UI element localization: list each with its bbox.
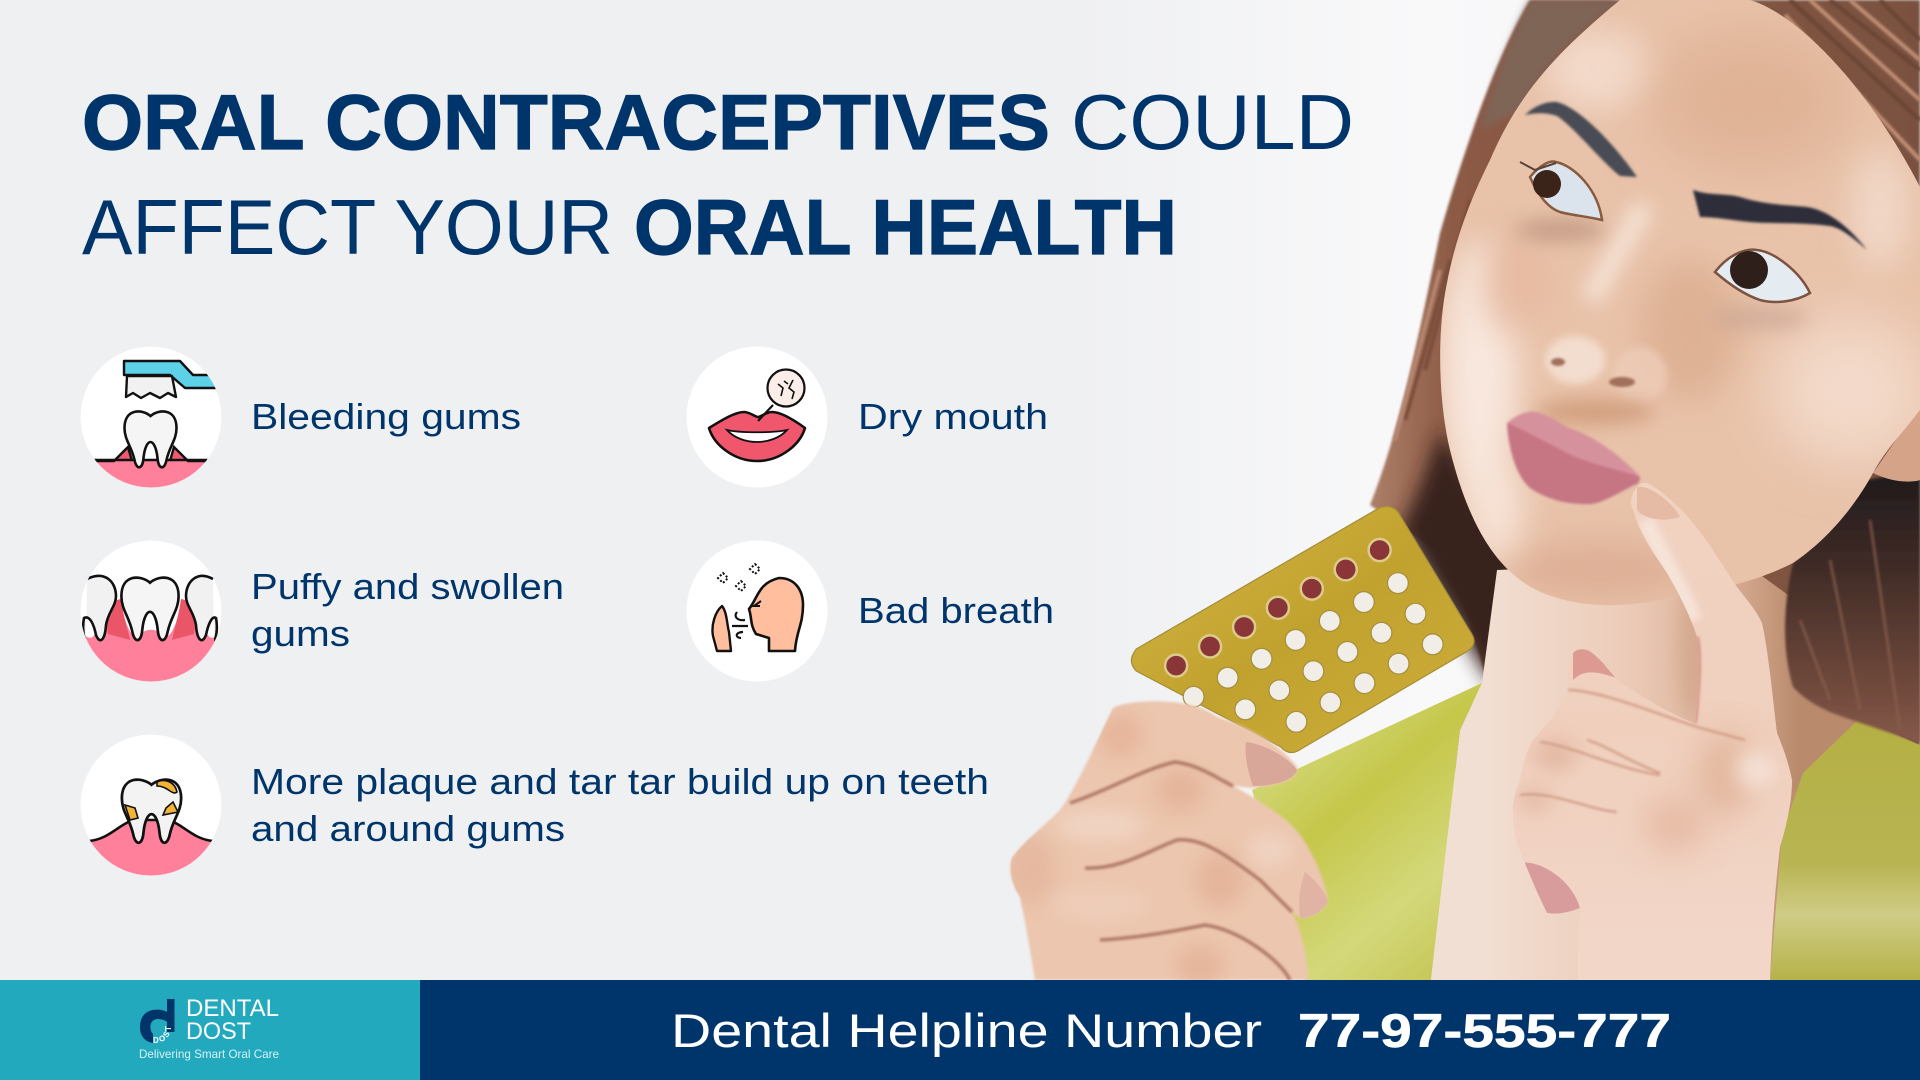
item: dry mouth — [686, 346, 1048, 488]
item: puffy and swollen gums — [80, 540, 564, 690]
finger creases left hand — [1070, 762, 1292, 980]
left hand holding pack — [1005, 701, 1328, 985]
title line 1 regular: COULD — [1071, 78, 1354, 166]
title line 2 bold: ORAL HEALTH — [634, 183, 1177, 271]
icon: swollen gums with teeth — [80, 540, 222, 690]
red pills — [1165, 539, 1391, 677]
hair — [1370, 0, 1920, 820]
lips — [1507, 412, 1640, 504]
white pills — [1183, 573, 1443, 732]
line 2: and around gums — [251, 808, 565, 849]
logo wordmark — [186, 995, 279, 1045]
icon: dry lips — [686, 346, 828, 488]
icon: person with bad breath — [686, 540, 828, 682]
word: dost: DOST — [186, 1018, 251, 1045]
footer teal logo panel — [0, 980, 420, 1080]
footer bar — [0, 980, 1920, 1080]
line 1: More plaque and tar tar build up on teeth — [251, 761, 989, 802]
shirt left — [1252, 683, 1482, 980]
title — [82, 78, 1354, 271]
photo: woman holding contraceptive pill pack — [1005, 0, 1920, 985]
label: Dry mouth — [858, 396, 1048, 437]
blister pack of pills — [1131, 506, 1474, 753]
title line 2 regular: AFFECT YOUR — [82, 183, 613, 271]
shirt right — [1770, 718, 1920, 980]
footer navy band — [420, 980, 1920, 1080]
ear — [1873, 405, 1920, 482]
hand shading — [1517, 487, 1775, 914]
icon: toothbrush and tooth — [80, 346, 222, 490]
lower right hair — [1785, 470, 1920, 743]
item: bleeding gums — [80, 346, 521, 490]
logo mark: S — [161, 1029, 172, 1039]
item: bad breath — [686, 540, 1054, 682]
title line 1 bold: ORAL CONTRACEPTIVES — [82, 78, 1050, 166]
line 1: Puffy and swollen — [251, 566, 564, 607]
icon: tooth with plaque — [80, 734, 222, 890]
logo tagline: Delivering Smart Oral Care — [139, 1047, 279, 1061]
left hand shading — [1005, 713, 1328, 985]
logo mark: D — [153, 1036, 159, 1045]
logo mark: T — [164, 1026, 173, 1031]
line 2: gums — [251, 613, 350, 654]
face shading — [1442, 30, 1920, 598]
item: plaque and tartar — [80, 734, 989, 890]
neck and chest — [1431, 560, 1870, 980]
label: Bleeding gums — [251, 396, 521, 437]
label — [251, 761, 989, 849]
label — [251, 566, 564, 654]
face — [1440, 0, 1920, 605]
right hand with finger on lip — [1513, 483, 1792, 980]
logo mark — [140, 999, 174, 1045]
label: Bad breath — [858, 590, 1054, 631]
helpline label: Dental Helpline Number — [671, 1004, 1262, 1057]
helpline number: 77-97-555-777 — [1298, 1004, 1671, 1057]
eye right — [1715, 250, 1810, 302]
logo mark: O — [158, 1033, 167, 1044]
word: dental: DENTAL — [186, 995, 279, 1022]
eye left — [1520, 162, 1602, 220]
logo: Dental Dost — [139, 995, 279, 1061]
finger creases — [1520, 690, 1745, 812]
nostrils — [1551, 358, 1635, 387]
eyebrows — [1525, 102, 1637, 177]
